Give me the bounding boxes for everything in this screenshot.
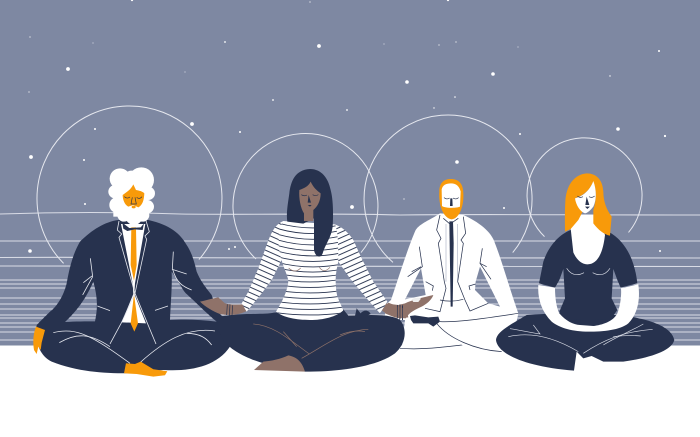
legs — [496, 312, 674, 371]
facial features — [577, 196, 595, 197]
right forearm — [382, 303, 408, 318]
hand left — [200, 297, 248, 315]
person: woman in striped top — [200, 297, 408, 372]
bracelets — [397, 304, 403, 320]
shirt lines — [446, 224, 457, 282]
person: man in white suit — [385, 213, 518, 352]
sky background — [0, 0, 700, 346]
trousers — [217, 309, 405, 372]
torso with sleeves — [539, 230, 637, 325]
hair — [565, 173, 612, 236]
mouth — [132, 206, 136, 208]
hair — [287, 169, 333, 257]
bracelets — [397, 305, 402, 320]
foot — [254, 355, 305, 372]
stars — [28, 0, 666, 253]
torso — [276, 221, 344, 320]
hand — [385, 295, 433, 318]
black tie — [449, 221, 454, 307]
person: man in dark suit — [33, 167, 237, 377]
left sleeve — [242, 221, 288, 312]
orange face — [123, 184, 144, 207]
suit outlines — [400, 215, 518, 352]
upper body: woman in striped top — [242, 169, 387, 325]
neck and chest — [571, 215, 605, 264]
dark accent near knee — [355, 308, 371, 316]
person: man head in white suit — [439, 179, 463, 219]
upper body: woman in dark top — [538, 173, 639, 332]
suit body and legs with gaps — [36, 220, 237, 373]
right sleeve — [332, 224, 387, 313]
person: woman in dark top — [496, 312, 674, 371]
dark foot — [410, 315, 440, 327]
chest lines — [567, 268, 610, 275]
white suit body — [385, 213, 518, 352]
leg crease lines — [253, 324, 368, 358]
crease lines — [508, 324, 653, 353]
face — [575, 181, 596, 213]
facial features — [301, 195, 318, 196]
facial features — [124, 197, 142, 204]
white arms — [538, 284, 639, 332]
head: beard and hair — [439, 179, 463, 219]
orange tie — [131, 227, 138, 332]
halo: woman centre — [233, 133, 378, 259]
orange hand — [33, 327, 45, 354]
halo circles — [37, 106, 642, 263]
white shirt — [121, 224, 146, 323]
fingers highlight — [412, 298, 421, 302]
orange foot — [124, 362, 167, 377]
water lines — [0, 212, 700, 340]
suit lines — [53, 221, 215, 363]
halo: woman right — [527, 138, 642, 237]
halo: man left — [37, 106, 222, 263]
face and neck — [299, 182, 321, 221]
face — [442, 183, 461, 208]
ground — [0, 346, 700, 437]
beard and hair — [108, 167, 155, 225]
breast lines — [289, 267, 330, 271]
halo: man right — [364, 115, 532, 262]
bracelets — [227, 304, 233, 316]
bow tie — [122, 223, 144, 231]
facial features — [444, 198, 459, 199]
